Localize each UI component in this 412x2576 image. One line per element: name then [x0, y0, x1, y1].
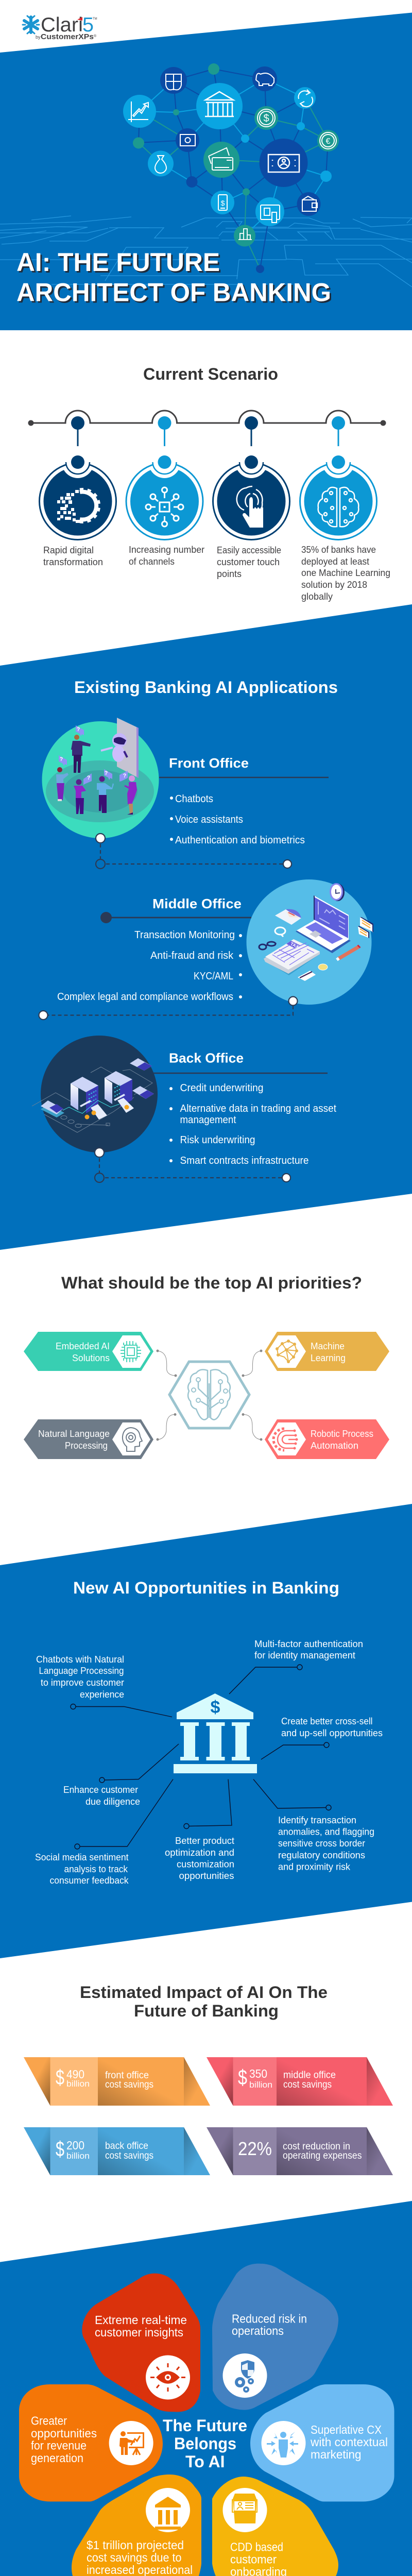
ribbon: front office cost savings — [24, 2057, 210, 2106]
bullet list: Authentication and biometrics — [175, 834, 305, 846]
bullet list: Transaction Monitoring — [134, 929, 235, 941]
icon: piggy bank — [256, 73, 274, 86]
title shadow — [18, 249, 333, 308]
ribbon: front office cost savings: cost savings — [105, 2079, 153, 2090]
item: natural language processing: Processing — [65, 1440, 108, 1451]
euro sign: € — [326, 137, 331, 146]
decorative circuit board pattern — [0, 216, 412, 287]
item: robotic process automation: Automation — [311, 1440, 358, 1451]
leader lines — [71, 1665, 331, 1849]
heading: New AI Opportunities: New AI Opportunities in Banking — [73, 1579, 339, 1597]
panel: middle office — [39, 879, 373, 1020]
bullet list: Voice assistants — [175, 814, 243, 825]
dashed connector — [39, 996, 298, 1020]
petal: customer insights — [82, 2274, 200, 2412]
logo: Clari5 by CustomerXPs: by — [36, 35, 41, 40]
bullet list: Alternative data in trading and asset — [180, 1103, 336, 1114]
question marks: ? — [60, 756, 63, 762]
caption: Increasing number — [129, 545, 204, 555]
heading: Existing Banking AI Applications: Existing Banking AI Applications — [74, 678, 338, 697]
question marks: ? — [123, 773, 127, 779]
text: multi-factor authentication: Multi-factor authentication — [254, 1638, 363, 1649]
data line and receipts — [63, 1100, 119, 1113]
icon: bank with dollar: $ — [211, 1698, 220, 1717]
text: due diligence: Enhance customer — [63, 1784, 138, 1795]
ribbon: cost reduction in operating expenses: 22% — [238, 2138, 272, 2159]
panel: rapid digital transformation — [39, 416, 116, 567]
caption: 35% of banks have — [301, 545, 376, 555]
illustration: chatbot with people — [42, 718, 159, 838]
ribbon: cost reduction in operating expenses: operating expenses — [283, 2150, 362, 2161]
icon: mobile dollar — [218, 195, 227, 210]
man thinking — [74, 779, 86, 814]
petal: revenue generation: opportunities — [31, 2427, 97, 2440]
ribbon: back office cost savings: cost savings — [105, 2150, 153, 2161]
icon: bank with dollar — [174, 1693, 257, 1773]
petal: reduced risk: Reduced risk in — [232, 2312, 307, 2326]
phone dollar sign: $ — [221, 199, 225, 207]
ribbon: back office cost savings: back office — [105, 2140, 148, 2151]
caption: one Machine Learning — [301, 568, 390, 578]
question marks: ? — [77, 726, 80, 733]
text: product optimization: Better product — [175, 1835, 234, 1846]
caption: of channels — [129, 556, 175, 567]
icon: credit cards — [209, 148, 233, 170]
text: transaction anomalies — [278, 1815, 374, 1872]
petal: superlative CX — [250, 2384, 394, 2502]
heading: top AI priorities: What should be the top AI priorities? — [61, 1274, 362, 1292]
text: due diligence: due diligence — [85, 1796, 140, 1807]
laptop — [296, 895, 351, 953]
question marks: ? — [105, 770, 108, 776]
center heading: Belongs — [174, 2434, 236, 2453]
dashed connector — [95, 1148, 290, 1182]
caption: solution by 2018 — [301, 580, 367, 590]
petal: CDD onboarding: CDD based — [230, 2540, 283, 2553]
caption: transformation — [43, 557, 103, 567]
petal: superlative CX: marketing — [311, 2448, 362, 2461]
icon: growth chart — [128, 101, 148, 122]
bullet list: management — [180, 1114, 236, 1126]
text: transaction anomalies: sensitive cross border — [278, 1838, 365, 1849]
icon: ATM — [261, 205, 280, 223]
title: ARCHITECT OF BANKING — [16, 278, 331, 307]
panel: front office — [42, 718, 329, 869]
panel: priorities hexagon diagram — [24, 1332, 389, 1459]
heading: Back Office — [169, 1050, 244, 1065]
icon: shield — [166, 74, 181, 90]
logo: Clari5 by CustomerXPs: Clari — [41, 14, 83, 36]
ribbon: front office cost savings: billion — [66, 2079, 90, 2089]
text: multi-factor authentication — [254, 1638, 363, 1660]
bank card — [298, 971, 316, 981]
panel: opportunities diagram — [35, 1638, 383, 1886]
pencil — [337, 946, 359, 960]
connection lines — [139, 69, 328, 269]
petal: revenue generation — [19, 2384, 163, 2502]
bullet list: Complex legal and compliance workflows — [57, 991, 233, 1003]
node circles — [160, 66, 320, 273]
petal: cost savings: $1 trillion projected — [87, 2538, 184, 2552]
center heading — [163, 2416, 247, 2471]
icon: snowflake — [23, 16, 39, 33]
petal: customer insights: Extreme real-time — [95, 2313, 187, 2327]
text: cross-sell — [281, 1716, 383, 1738]
bullet list: Risk underwriting — [180, 1134, 255, 1146]
timeline — [28, 411, 386, 426]
panel: increasing number of channels — [126, 416, 204, 567]
woman right — [124, 775, 137, 815]
bullet list: Smart contracts infrastructure — [180, 1155, 309, 1166]
text: due diligence — [63, 1784, 140, 1807]
text: chatbots with NLP: Language Processing — [39, 1665, 124, 1676]
leader line — [100, 912, 251, 923]
text: chatbots with NLP: Chatbots with Natural — [36, 1654, 124, 1665]
question marks: ? — [87, 775, 91, 781]
title shadow: AI: THE FUTURE — [18, 249, 221, 278]
petal: superlative CX: with contextual — [310, 2435, 388, 2449]
logo: Clari5 by CustomerXPs — [23, 14, 97, 41]
text: transaction anomalies: regulatory conditions — [278, 1850, 365, 1860]
petal: revenue generation: for revenue — [31, 2439, 87, 2452]
ribbon: back office cost savings: 200 — [66, 2139, 84, 2152]
heading: Estimated Impact — [80, 1983, 328, 2020]
question marks — [60, 726, 127, 781]
icon: wallet — [302, 196, 317, 211]
central brain hexagon — [169, 1362, 249, 1428]
icon: money bag — [155, 156, 166, 173]
ribbon: back office cost savings: billion — [66, 2151, 90, 2161]
center heading: The Future — [163, 2416, 247, 2435]
network of banking icons — [123, 63, 339, 273]
coin — [318, 964, 328, 970]
panel: 35% of banks — [300, 416, 390, 602]
ribbon: middle office cost savings — [207, 2057, 393, 2106]
ribbon: front office cost savings: front office — [105, 2070, 149, 2081]
title shadow: ARCHITECT OF BANKING — [18, 279, 333, 308]
text: social media: consumer feedback — [49, 1875, 129, 1886]
petal: customer insights: customer insights — [95, 2326, 183, 2339]
ribbon: front office cost savings: 490 — [66, 2067, 84, 2081]
illustration: servers — [32, 1036, 158, 1153]
dollar sign: $ — [263, 113, 269, 124]
text: social media: Social media sentiment — [35, 1852, 129, 1862]
icon: touch hand — [237, 486, 263, 528]
bullet list: KYC/AML — [194, 970, 233, 982]
logo: Clari5 by CustomerXPs: 5 — [82, 14, 94, 36]
envelope — [275, 909, 301, 925]
ribbon: back office cost savings — [24, 2127, 210, 2175]
caption: customer touch — [217, 557, 280, 567]
server tower 1 — [71, 1077, 98, 1113]
illustration: laptop and tax documents — [246, 879, 373, 1005]
item: embedded AI solutions: Solutions — [72, 1352, 110, 1363]
bullet list — [170, 793, 305, 846]
petal: cost savings — [72, 2475, 201, 2576]
petal: revenue generation: Greater — [31, 2414, 67, 2428]
text: product optimization: opportunities — [179, 1870, 234, 1881]
item: robotic process automation: Robotic Process — [311, 1428, 373, 1439]
center heading: To AI — [185, 2452, 225, 2471]
petal: superlative CX: Superlative CX — [311, 2423, 382, 2436]
tax label: TAX — [289, 941, 300, 950]
heading: Estimated Impact: Estimated Impact of AI On The — [80, 1983, 328, 2002]
ribbon: cost reduction in operating expenses — [207, 2127, 393, 2175]
caption — [217, 545, 281, 579]
text: product optimization — [165, 1835, 234, 1881]
item: natural language processing: Natural Language — [38, 1428, 110, 1439]
bullet list: Credit underwriting — [180, 1082, 264, 1094]
coins — [84, 1105, 129, 1119]
text: product optimization: optimization and — [165, 1847, 234, 1858]
bullet list — [169, 1082, 336, 1166]
bullet list — [57, 929, 242, 1003]
text: chatbots with NLP: to improve customer — [41, 1677, 124, 1688]
item: machine learning: Machine — [311, 1341, 345, 1351]
item: embedded AI solutions — [24, 1332, 153, 1371]
ribbon: middle office cost savings: middle office — [283, 2069, 336, 2080]
caption: globally — [301, 591, 333, 602]
woman left — [56, 767, 68, 801]
clock — [330, 883, 345, 901]
ribbon: cost reduction in operating expenses: cost reduction in — [283, 2141, 350, 2152]
icon: safe — [180, 134, 195, 146]
man in blue shirt — [97, 776, 114, 813]
server tower 2 — [105, 1071, 132, 1107]
tax document — [264, 939, 320, 975]
logo: Clari5 by CustomerXPs: TM — [93, 18, 97, 21]
petal: CDD onboarding — [212, 2477, 338, 2576]
petal: CDD onboarding: customer — [230, 2552, 277, 2566]
curved connectors — [157, 1350, 263, 1440]
caption — [43, 545, 103, 567]
caption — [301, 545, 390, 602]
panel: back office — [32, 1036, 336, 1182]
icon: refresh arrows — [298, 90, 313, 107]
icon: bank building — [205, 92, 234, 116]
icon: pixel gear — [57, 489, 99, 523]
text: chatbots with NLP — [36, 1654, 124, 1700]
title: AI: THE FUTURE — [16, 248, 220, 277]
caption: Rapid digital — [43, 545, 94, 555]
text: social media: analysis to track — [64, 1863, 128, 1874]
icon: circuit brain — [318, 487, 358, 527]
item: machine learning — [265, 1332, 389, 1371]
ribbon: front office cost savings: $ — [56, 2065, 64, 2089]
caption: Easily accessible — [217, 545, 281, 555]
text: multi-factor authentication: for identity management — [254, 1650, 355, 1660]
dashed connector — [96, 834, 291, 869]
text: transaction anomalies: and proximity risk — [278, 1861, 351, 1872]
logo: Clari5 by CustomerXPs: CustomerXPs — [41, 32, 94, 41]
heading: Front Office — [169, 755, 249, 771]
ribbon: middle office cost savings: billion — [249, 2080, 272, 2090]
caption — [129, 545, 204, 567]
panel: the future belongs to AI — [19, 2264, 394, 2576]
text: transaction anomalies: anomalies, and flagging — [278, 1826, 374, 1837]
question bubbles — [59, 725, 128, 785]
ribbon: middle office cost savings: cost savings — [283, 2079, 332, 2090]
heading: Current Scenario: Current Scenario — [143, 365, 278, 383]
petal: reduced risk: operations — [232, 2324, 284, 2337]
caption: deployed at least — [301, 556, 369, 567]
text: social media — [35, 1852, 129, 1886]
platforms — [41, 1058, 154, 1117]
title — [16, 248, 333, 308]
icon: bar chart — [238, 229, 252, 240]
magnifier — [275, 927, 285, 937]
bullet list: Chatbots — [175, 793, 213, 805]
bullet list: Anti-fraud and risk — [150, 950, 234, 961]
heading: Estimated Impact: Future of Banking — [134, 2002, 279, 2020]
icon: banknote portrait — [268, 155, 299, 172]
ribbon: back office cost savings: $ — [56, 2137, 64, 2161]
icon: euro coin — [320, 132, 336, 149]
text: cross-sell: and up-sell opportunities — [281, 1727, 383, 1738]
item: embedded AI solutions: Embedded AI — [56, 1341, 110, 1351]
glasses — [259, 942, 276, 950]
text: cross-sell: Create better cross-sell — [281, 1716, 373, 1726]
man standing — [71, 735, 91, 773]
caption: points — [217, 569, 242, 579]
icon: dollar coin — [258, 109, 275, 127]
text: chatbots with NLP: experience — [80, 1689, 124, 1700]
text: product optimization: customization — [177, 1859, 234, 1869]
text: transaction anomalies: Identify transaction — [278, 1815, 356, 1825]
icon: network chip — [146, 487, 183, 527]
heading: Middle Office — [152, 896, 242, 911]
petal: revenue generation: generation — [31, 2451, 83, 2465]
petal: cost savings: cost savings due to — [87, 2551, 181, 2564]
speech bubbles — [358, 917, 373, 938]
petal: reduced risk — [212, 2264, 338, 2410]
panel: easily accessible customer touch points — [213, 416, 289, 579]
item: robotic process automation — [265, 1419, 389, 1459]
logo: Clari5 by CustomerXPs: ® — [94, 34, 97, 38]
item: natural language processing — [24, 1419, 153, 1459]
ribbon: middle office cost savings: $ — [238, 2065, 247, 2089]
ribbon: middle office cost savings: 350 — [249, 2067, 267, 2080]
item: machine learning: Learning — [311, 1352, 346, 1363]
